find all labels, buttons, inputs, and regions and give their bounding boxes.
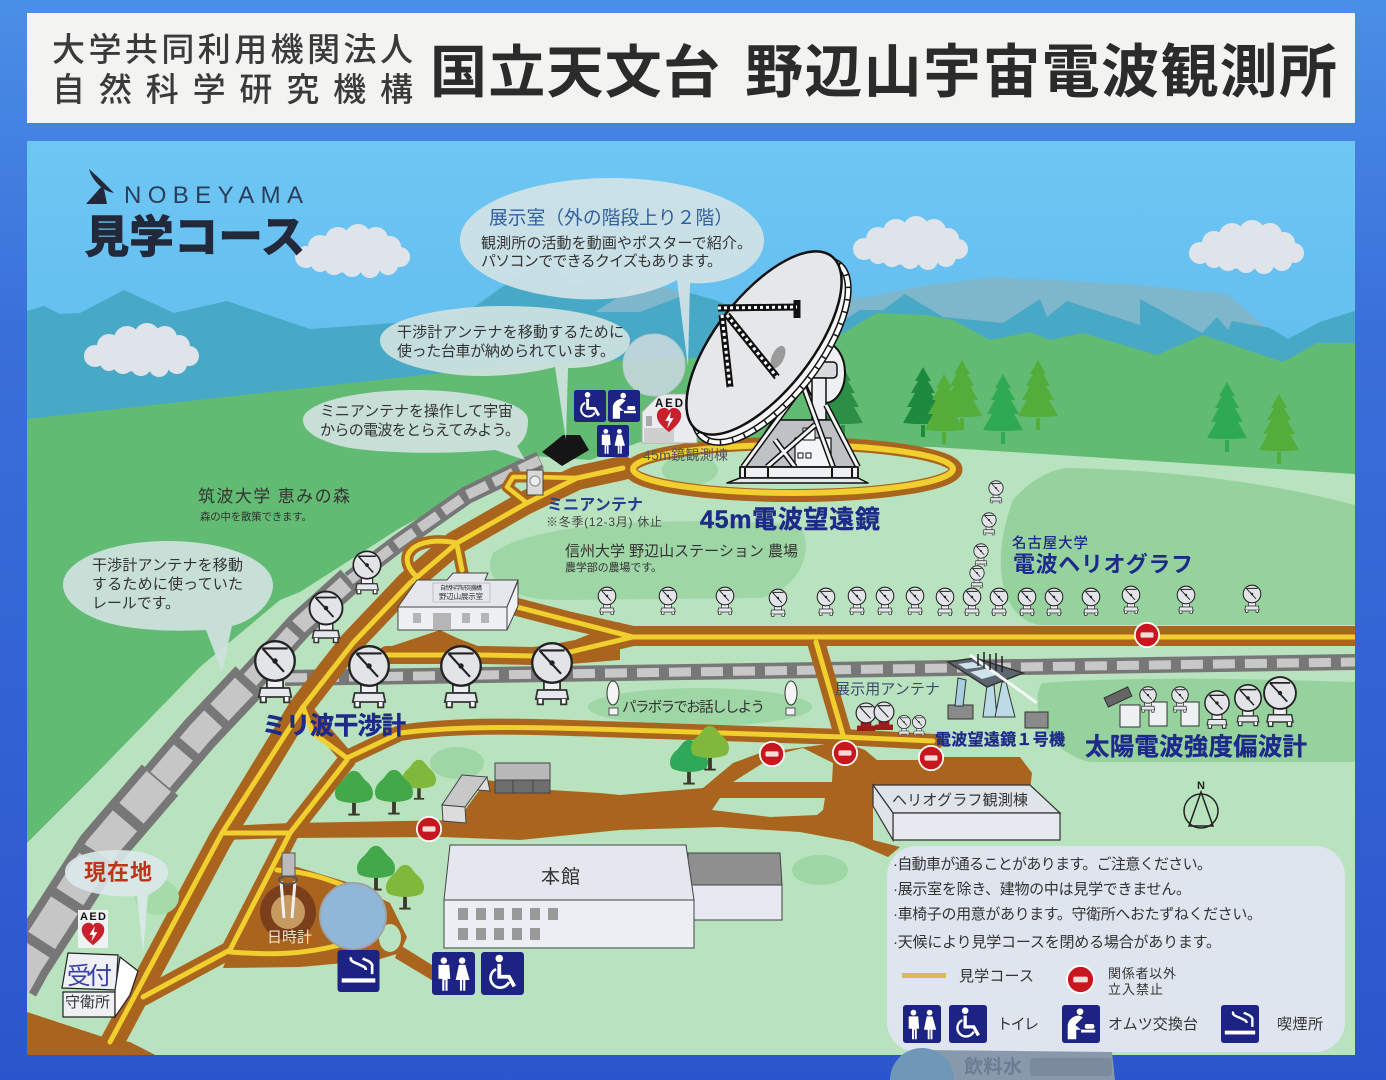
legend: diaper table [1062, 1005, 1198, 1043]
radioheliograph label: 名古屋大学 [1012, 535, 1088, 552]
icon: dish logo [86, 169, 114, 204]
exhibit room text: 観測所の活動を動画やポスターで紹介。 [481, 235, 752, 252]
legend: no entry: 関係者以外 [1108, 966, 1176, 981]
heliograph observation building: ヘリオグラフ観測棟 [892, 792, 1028, 809]
sky [27, 141, 1355, 339]
rail bubble text: するために使っていた [92, 576, 243, 593]
millimeter array antennas [255, 551, 572, 707]
forest label: 森の中を散策できます。 [200, 510, 312, 523]
reception gatehouse [62, 953, 138, 1017]
exhibition hall building: 自然科学研究機構 [440, 584, 482, 592]
AED at gate [78, 910, 108, 948]
mini antenna bubble text: からの電波をとらえてみよう。 [320, 422, 520, 439]
main building [444, 845, 782, 948]
title banner [27, 13, 1355, 123]
drinking water sticker [890, 1048, 1115, 1080]
sticker circle on map [320, 883, 386, 949]
45m telescope label: 45m電波望遠鏡 [700, 506, 880, 534]
mini antenna marker [527, 470, 543, 495]
north arrow [1184, 780, 1218, 828]
telescope yoke and pedestal [727, 343, 868, 483]
organisation name [52, 31, 413, 108]
organisation name: 大学共同利用機関法人 [52, 31, 413, 68]
rail bubble text: 干渉計アンテナを移動 [92, 557, 243, 574]
observatory name: 野辺山宇宙電波観測所 [745, 40, 1337, 105]
exhibit antennas [856, 702, 926, 736]
parabola talk [607, 681, 797, 716]
radioheliograph label [1012, 535, 1193, 577]
millimeter array label: ミリ波干渉計 [262, 712, 406, 740]
mini antenna label: ※冬季(12-3月) 休止 [546, 514, 662, 529]
legend: diaper table: オムツ交換台 [1108, 1016, 1198, 1033]
AED at 45m [655, 398, 683, 432]
forest label: 筑波大学 恵みの森 [198, 487, 350, 506]
rail speech bubble [63, 541, 273, 672]
mini antenna label: ミニアンテナ [547, 497, 643, 514]
dish surface [685, 250, 843, 436]
notes: ·天候により見学コースを閉める場合があります。 [893, 934, 1221, 951]
logo [85, 169, 305, 262]
rail bubble text [92, 557, 243, 612]
farm label: 信州大学 野辺山ステーション 農場 [565, 543, 798, 560]
solar polarimeters [1104, 677, 1296, 728]
cart shed text: 使った台車が納められています。 [397, 343, 615, 360]
exhibit room speech bubble [460, 178, 764, 367]
mini antenna bubble text: ミニアンテナを操作して宇宙 [320, 403, 513, 420]
exhibit room text: パソコンでできるクイズもあります。 [481, 253, 722, 270]
sticker circle [623, 334, 685, 396]
facility icons near 45m [574, 390, 640, 457]
legend: toilets [903, 1005, 1039, 1043]
observatory name [430, 40, 1337, 105]
viewing course (yellow) [110, 445, 1355, 1042]
notes and legend panel [887, 846, 1345, 1052]
cart shed speech bubble [380, 306, 630, 440]
no entry signs [417, 623, 1159, 841]
clouds over the mountains: left lower cloud [84, 323, 199, 377]
no.1 label: 電波望遠鏡１号機 [935, 730, 1065, 749]
sundial [260, 853, 316, 946]
observatory name: 国立天文台 [430, 41, 720, 105]
45m building label: 45m鏡観測棟 [643, 447, 728, 463]
AED at gate: AED [80, 911, 106, 923]
farm label [565, 543, 798, 574]
sundial: 日時計 [267, 929, 312, 946]
logo: NOBEYAMA [124, 182, 303, 209]
clouds [84, 216, 1304, 377]
feed support [718, 300, 797, 387]
parabola talk: パラボラでお話ししよう [622, 699, 765, 716]
logo: 見学コース [85, 213, 305, 262]
legend: no entry: 立入禁止 [1108, 982, 1163, 997]
tunnel shed [542, 435, 589, 466]
deciduous trees [335, 726, 729, 909]
exhibit room text: 展示室（外の階段上り２階） [489, 207, 733, 228]
AED at 45m: AED [655, 398, 683, 410]
notes: ·展示室を除き、建物の中は見学できません。 [893, 881, 1191, 898]
current location bubble: 現在地 [84, 860, 152, 885]
legend: smoking: 喫煙所 [1277, 1016, 1323, 1033]
45m radio telescope [685, 250, 869, 484]
legend: toilets: トイレ [997, 1016, 1039, 1033]
small buildings [442, 763, 550, 823]
legend: course: 見学コース [959, 968, 1034, 985]
rail bubble text: レールです。 [92, 595, 180, 612]
mini antenna speech bubble [303, 390, 528, 460]
current location bubble [65, 850, 179, 953]
exhibition hall building: 野辺山展示室 [439, 591, 484, 601]
notes: ·自動車が通ることがあります。ご注意ください。 [893, 856, 1212, 873]
drinking water sticker: 飲料水 [964, 1056, 1022, 1078]
heliograph observation building [873, 785, 1060, 840]
main building toilets [432, 952, 524, 995]
notes [893, 856, 1262, 951]
cart shed text [397, 324, 624, 360]
farm label: 農学部の農場です。 [565, 560, 662, 574]
45m building [642, 394, 697, 443]
notes: ·車椅子の用意があります。守衛所へおたずねください。 [893, 906, 1262, 923]
pale ground [27, 442, 1355, 1055]
pale lobes inside brown areas [379, 748, 833, 952]
main building: 本館 [541, 866, 580, 888]
exhibition hall building [398, 573, 518, 630]
north arrow: N [1197, 780, 1205, 792]
radio telescope no.1 [948, 652, 1048, 728]
cart shed text: 干渉計アンテナを移動するために [397, 324, 624, 341]
distant mountains [27, 277, 1355, 419]
reception gatehouse: 守衛所 [65, 994, 110, 1011]
smoking icon [338, 950, 380, 992]
exhibit antenna label: 展示用アンテナ [835, 681, 940, 698]
reception gatehouse: 受付 [67, 963, 112, 990]
dish rim lattice [692, 258, 852, 446]
legend: smoking [1221, 1005, 1323, 1043]
conifer trees [823, 360, 1299, 464]
mini antenna label [546, 497, 662, 529]
exhibit room text [481, 207, 752, 270]
railway: horizontal track [285, 662, 1355, 678]
roads (brown) [27, 444, 1360, 1060]
field patches [430, 455, 1355, 885]
solar polarimeter label: 太陽電波強度偏波計 [1085, 733, 1307, 761]
legend: no entry [1067, 966, 1176, 997]
mini antenna bubble text [320, 403, 520, 439]
brown plaza and bulges [222, 622, 1032, 985]
radioheliograph label: 電波ヘリオグラフ [1013, 552, 1193, 577]
legend: course [902, 968, 1034, 985]
forest label [198, 487, 350, 523]
green fields [27, 313, 1355, 843]
radioheliograph antennas [598, 481, 1261, 616]
organisation name: 自然科学研究機構 [52, 71, 413, 108]
railway: left curve [15, 460, 540, 985]
